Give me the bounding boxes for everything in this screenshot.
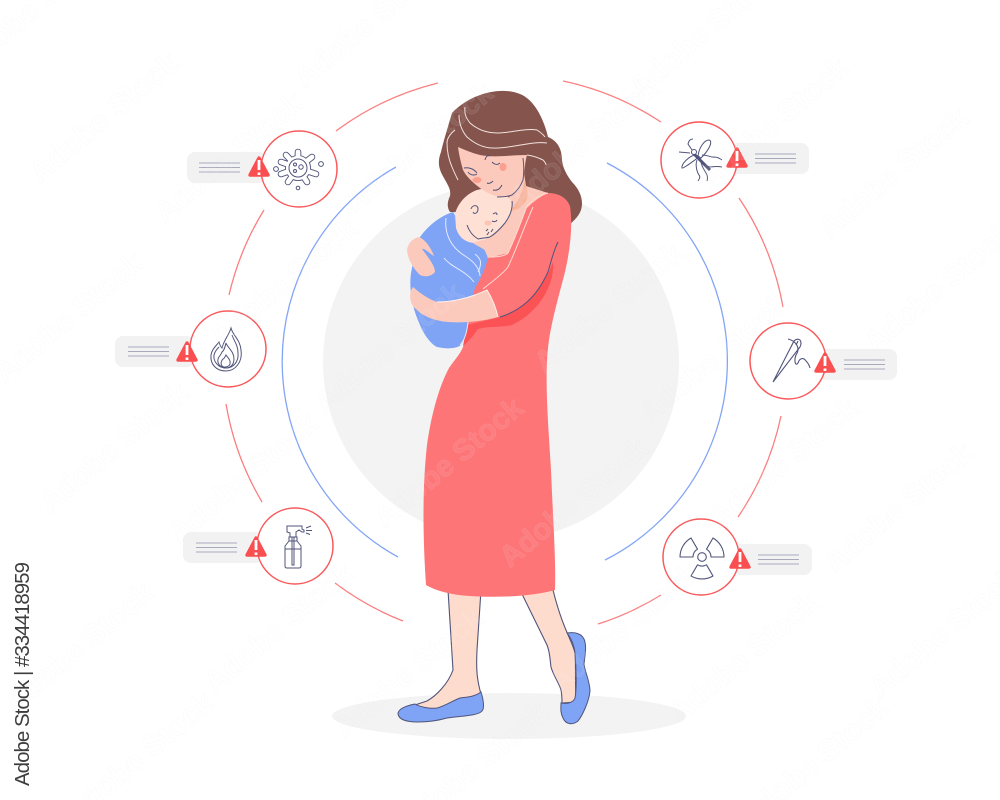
label pill [187,152,267,183]
legs [415,590,576,712]
watermark: Adobe Stock [528,236,690,379]
hazard: spray [183,508,333,584]
swaddle folds [444,218,481,345]
dress [424,193,571,597]
icon circle [750,323,826,399]
icon: spray bottle [285,526,312,568]
label pill [115,336,195,367]
label pill [183,532,263,563]
label pill [817,349,897,380]
label pill [729,143,809,174]
icon: alert [731,550,749,567]
baby swaddle [410,212,488,348]
watermark: Adobe Stock [813,101,975,244]
watermark: Adobe Stock [633,286,795,429]
icon: alert [728,149,746,166]
watermark: Adobe Stock [543,556,705,699]
watermark: Adobe Stock [203,211,365,354]
ground shadow [332,693,686,739]
text lines [199,163,240,172]
watermark: Adobe Stock [818,436,980,579]
baby face lines [467,201,512,239]
hazard: needle [750,323,897,399]
watermark: Adobe Stock [338,76,500,219]
icon: radiation [680,538,724,579]
hair [439,91,582,226]
baby head [455,189,512,243]
upper arm of mother [407,237,435,276]
watermark: Adobe Stock [503,71,665,214]
icon circle [261,131,337,207]
watermark: Adobe Stock [368,391,530,534]
text lines [755,154,796,163]
icon: alert [178,343,196,360]
shoes [398,633,590,724]
watermark: Adobe Stock [328,601,490,744]
neck and chest [482,160,548,258]
watermark: Adobe Stock [163,406,325,549]
jaw line [497,158,524,197]
watermark: Adobe Stock [198,556,360,699]
baby hand [473,239,498,252]
hazard: mosquito [661,122,809,198]
inner blue ring [282,163,727,560]
cheeks [472,163,506,183]
mother face [458,147,527,197]
text lines [196,543,237,552]
stock id caption: Adobe Stock | #334418959 [11,562,34,786]
icon: alert [250,158,268,175]
sleeve shadow [463,262,553,346]
hazard: radiation [663,519,812,595]
icon circle [190,311,266,387]
figure: mother and baby [398,91,590,724]
text lines [758,555,799,564]
baby cheek [484,220,492,226]
icon: needle and thread [773,339,810,382]
lower arm of mother [410,287,498,322]
icon: virus [274,152,323,190]
watermark: Adobe Stock [148,86,310,229]
hazard: fire [115,311,266,387]
icon: mosquito [679,139,722,181]
hair strands [447,107,547,180]
icon circle [257,508,333,584]
watermark: Adobe Stock [663,586,825,729]
background disc [323,184,679,540]
dress seams [483,193,558,317]
neck shadow [509,180,528,212]
icon circle [663,519,739,595]
icon: flame [211,328,241,371]
outer pink ring segments [226,81,783,624]
watermark: Adobe Stock [308,276,470,419]
watermark: Adobe Stock [33,376,195,519]
watermark: Adobe Stock [0,576,160,719]
icon: alert [247,538,265,555]
text lines [844,360,885,369]
icon circle [661,122,737,198]
text lines [128,347,169,356]
face details [464,156,502,190]
watermark: Adobe Stock [493,431,655,574]
icon: alert [816,354,834,371]
arm highlight [437,290,498,317]
watermark: Adobe Stock [703,391,865,534]
watermark: Adobe Stock [23,46,185,189]
watermark: Adobe Stock [693,51,855,194]
hazard: virus [187,131,337,207]
label pill [732,544,812,575]
